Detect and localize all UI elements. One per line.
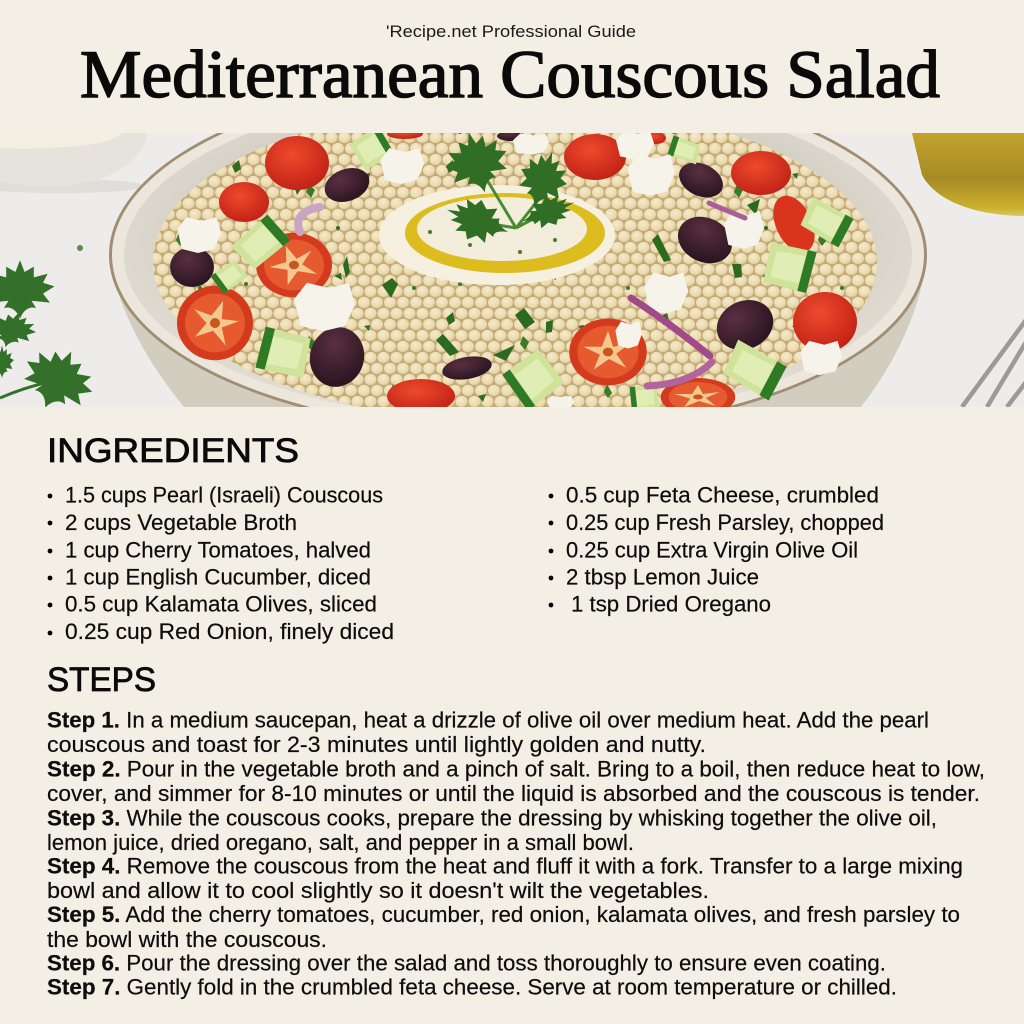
ingredients list: left column: 1 cup English Cucumber, diced <box>65 564 371 590</box>
cut tomatoes <box>166 224 735 416</box>
couscous <box>153 133 877 407</box>
steps text: Step 7. Gently fold in the crumbled feta cheese. Serve at room temperature or chilled. <box>47 974 897 1000</box>
ingredients list: right column: 1 tsp Dried Oregano <box>571 592 771 616</box>
small bowl of feta <box>0 133 147 193</box>
steps text: cover, and simmer for 8-10 minutes or until the liquid is absorbed and the couscous is tender. <box>47 781 980 806</box>
source line: 'Recipe.net Professional Guide <box>386 22 636 41</box>
ingredients list: right column: 0.25 cup Extra Virgin Olive Oil <box>566 538 858 562</box>
ingredients list: left column: 1 cup Cherry Tomatoes, halved <box>65 538 371 562</box>
steps text: Step 4. Remove the couscous from the heat and fluff it with a fork. Transfer to a large mixing <box>47 854 963 878</box>
ingredients list: right column: 0.5 cup Feta Cheese, crumbled <box>566 482 879 508</box>
feta crumbles <box>177 131 842 410</box>
ingredients list: left column: 0.25 cup Red Onion, finely diced <box>65 619 394 644</box>
steps text: Step 6. Pour the dressing over the salad and toss thoroughly to ensure even coating. <box>47 950 886 976</box>
title: Mediterranean Couscous Salad <box>80 36 940 112</box>
steps text: Step 2. Pour in the vegetable broth and a pinch of salt. Bring to a boil, then reduce heat to low, <box>47 756 985 782</box>
chopped herb pieces <box>295 190 760 361</box>
ingredients list: left column <box>48 482 394 644</box>
ingredients list: right column: 0.25 cup Fresh Parsley, chopped <box>566 510 884 535</box>
steps text: the bowl with the couscous. <box>47 927 327 952</box>
steps text: couscous and toast for 2-3 minutes until lightly golden and nutty. <box>47 732 706 757</box>
steps heading: STEPS <box>47 661 156 699</box>
olives <box>170 131 781 393</box>
cucumber pieces <box>209 124 857 413</box>
ingredients list: left column: 0.5 cup Kalamata Olives, sliced <box>65 592 377 616</box>
steps text <box>47 708 985 1000</box>
cream and olive oil centre <box>379 185 615 285</box>
parsley sprigs on the counter <box>0 245 92 407</box>
bowl outer wall and rim <box>109 133 927 407</box>
fork <box>962 320 1024 407</box>
steps text: lemon juice, dried oregano, salt, and pepper in a small bowl. <box>47 830 634 855</box>
steps text: Step 1. In a medium saucepan, heat a drizzle of olive oil over medium heat. Add the pearl <box>47 708 929 732</box>
ingredients list: left column: 2 cups Vegetable Broth <box>65 510 297 535</box>
parsley garnish <box>446 133 574 243</box>
steps text: Step 5. Add the cherry tomatoes, cucumber, red onion, kalamata olives, and fresh parsley to <box>47 902 960 927</box>
ingredients list: right column <box>549 482 884 616</box>
olive oil glass <box>912 133 1024 216</box>
ingredients list: right column: 2 tbsp Lemon Juice <box>566 564 759 590</box>
whole tomatoes <box>219 129 857 413</box>
steps text: bowl and allow it to cool slightly so it doesn't wilt the vegetables. <box>47 878 709 903</box>
ingredients list: left column: 1.5 cups Pearl (Israeli) Couscous <box>65 482 383 508</box>
steps text: Step 3. While the couscous cooks, prepare the dressing by whisking together the olive oil, <box>47 806 937 830</box>
ingredients heading: INGREDIENTS <box>47 432 299 470</box>
red onion slices <box>298 203 745 386</box>
hero photo illustration: salad bowl <box>0 133 1024 407</box>
